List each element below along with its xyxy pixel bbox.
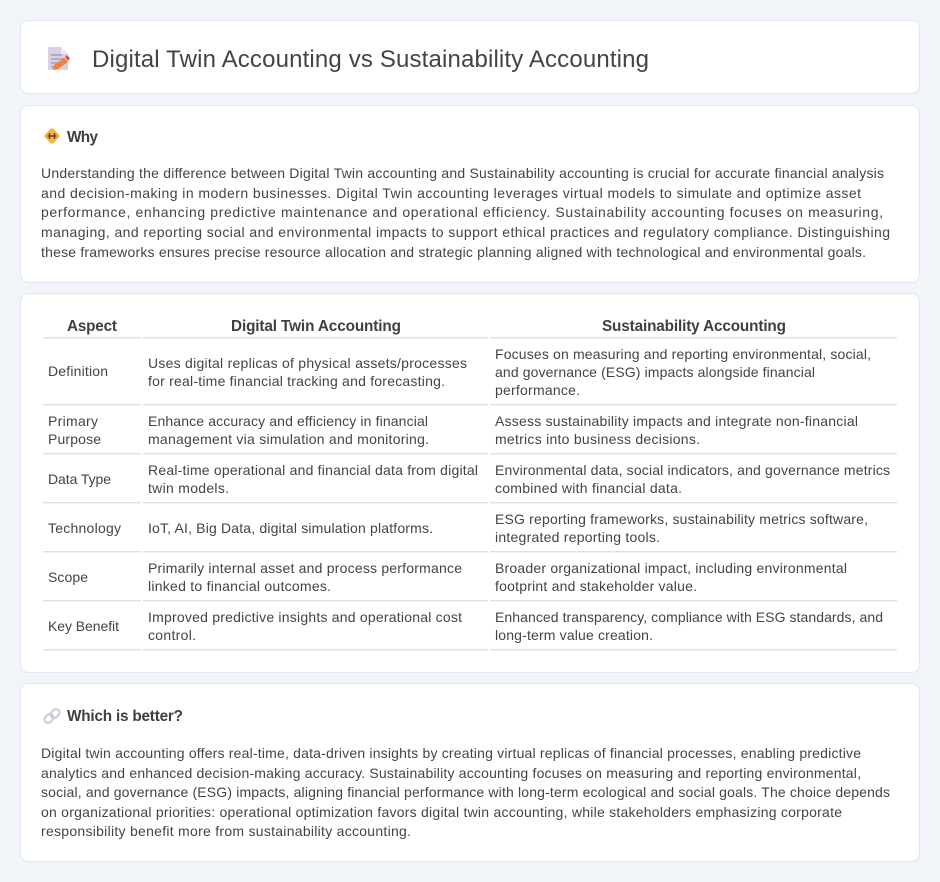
table row: scope: Primarily internal asset and process performance xyxy=(148,560,462,576)
heading: why: Why xyxy=(67,129,98,146)
table row: data type: Data Type xyxy=(48,471,111,487)
title: Digital Twin Accounting vs Sustainability Accounting xyxy=(92,46,649,73)
table row: key benefit: control. xyxy=(148,627,196,643)
panel: comparison table xyxy=(20,294,920,672)
table row: primary purpose: Purpose xyxy=(48,431,101,447)
table row: primary purpose: metrics into business decisions. xyxy=(495,431,700,447)
table row: data type: combined with financial data. xyxy=(495,480,682,496)
panel: which is better xyxy=(20,684,920,862)
text block: which is better explanation: on organizational priorities: operational optimization favors digital twin accounting, while stakeholders emphasizing corporate xyxy=(41,804,842,820)
table header row: Aspect xyxy=(67,318,117,335)
text block: which is better explanation: responsibility benefit more from sustainability accounting. xyxy=(41,823,411,839)
table row: key benefit xyxy=(43,609,897,650)
icon: document with pencil xyxy=(48,47,70,70)
panel: title header xyxy=(20,20,920,94)
table row: scope: linked to financial outcomes. xyxy=(148,578,331,594)
heading: which is better: Which is better? xyxy=(67,708,183,725)
text block: why explanation: Understanding the difference between Digital Twin accounting and Sustainability accounting is crucial for accurate financial analysis xyxy=(41,165,884,181)
text block: which is better explanation: analytics and enhanced decision-making accuracy. Sustainability accounting focuses on measuring and reporting environmental, xyxy=(41,765,861,781)
table row: definition: for real-time financial tracking and forecasting. xyxy=(148,373,445,389)
table row: technology: IoT, AI, Big Data, digital simulation platforms. xyxy=(148,520,433,536)
text block: which is better explanation: Digital twin accounting offers real-time, data-driven insights by creating virtual replicas of financial processes, enabling predictive xyxy=(41,745,861,761)
table row: definition: performance. xyxy=(495,382,580,398)
table row: key benefit: long-term value creation. xyxy=(495,627,653,643)
table header row xyxy=(43,318,897,338)
text block: why explanation: managing, and reporting social and environmental impacts to support ethical practices and regulatory compliance. Distinguishing xyxy=(41,224,890,240)
table row: technology: Technology xyxy=(48,520,121,536)
table row: data type xyxy=(43,462,897,503)
table row: data type: twin models. xyxy=(148,480,229,496)
table row: data type: Real-time operational and financial data from digital xyxy=(148,462,478,478)
table row: key benefit: Enhanced transparency, compliance with ESG standards, and xyxy=(495,609,883,625)
table row: scope: Scope xyxy=(48,569,88,585)
table row: key benefit: Key Benefit xyxy=(48,618,119,634)
table row: primary purpose xyxy=(43,413,897,454)
icon: orange diamond sign xyxy=(44,128,60,144)
table row: key benefit: Improved predictive insights and operational cost xyxy=(148,609,462,625)
text block: why explanation: these frameworks ensures precise resource allocation and strategic planning aligned with technological and environmental goals. xyxy=(41,244,866,260)
table row: scope: footprint and stakeholder value. xyxy=(495,578,697,594)
text block: why explanation xyxy=(41,165,890,260)
table row: primary purpose: Assess sustainability impacts and integrate non-financial xyxy=(495,413,858,429)
table row: primary purpose: Primary xyxy=(48,413,98,429)
table header row: Sustainability Accounting xyxy=(602,318,786,335)
table row: definition: Focuses on measuring and reporting environmental, social, xyxy=(495,346,871,362)
table row: definition: Uses digital replicas of physical assets/processes xyxy=(148,355,467,371)
table header row: Digital Twin Accounting xyxy=(231,318,401,335)
table row: definition: Definition xyxy=(48,363,108,379)
table row: primary purpose: Enhance accuracy and efficiency in financial xyxy=(148,413,428,429)
text block: why explanation: performance, enhancing predictive maintenance and operational efficiency. Sustainability accounting focuses on measuring, xyxy=(41,204,883,220)
table row: technology xyxy=(43,511,897,552)
table row: data type: Environmental data, social indicators, and governance metrics xyxy=(495,462,890,478)
table row: scope xyxy=(43,560,897,601)
table row: definition: and governance (ESG) impacts alongside financial xyxy=(495,364,815,380)
table row: scope: Broader organizational impact, including environmental xyxy=(495,560,847,576)
table row: technology: ESG reporting frameworks, sustainability metrics software, xyxy=(495,511,868,527)
table row: technology: integrated reporting tools. xyxy=(495,529,660,545)
table row: definition xyxy=(43,346,897,405)
text block: which is better explanation: social, and governance (ESG) impacts, aligning financial performance with long-term ecological and social goals. The choice depends xyxy=(41,784,890,800)
table row: primary purpose: management via simulation and monitoring. xyxy=(148,431,429,447)
text block: why explanation: and decision-making in modern businesses. Digital Twin accounting leverages virtual models to simulate and optimize asset xyxy=(41,185,861,201)
icon: chain link xyxy=(43,707,61,725)
panel: why xyxy=(20,106,920,282)
text block: which is better explanation xyxy=(41,745,890,839)
